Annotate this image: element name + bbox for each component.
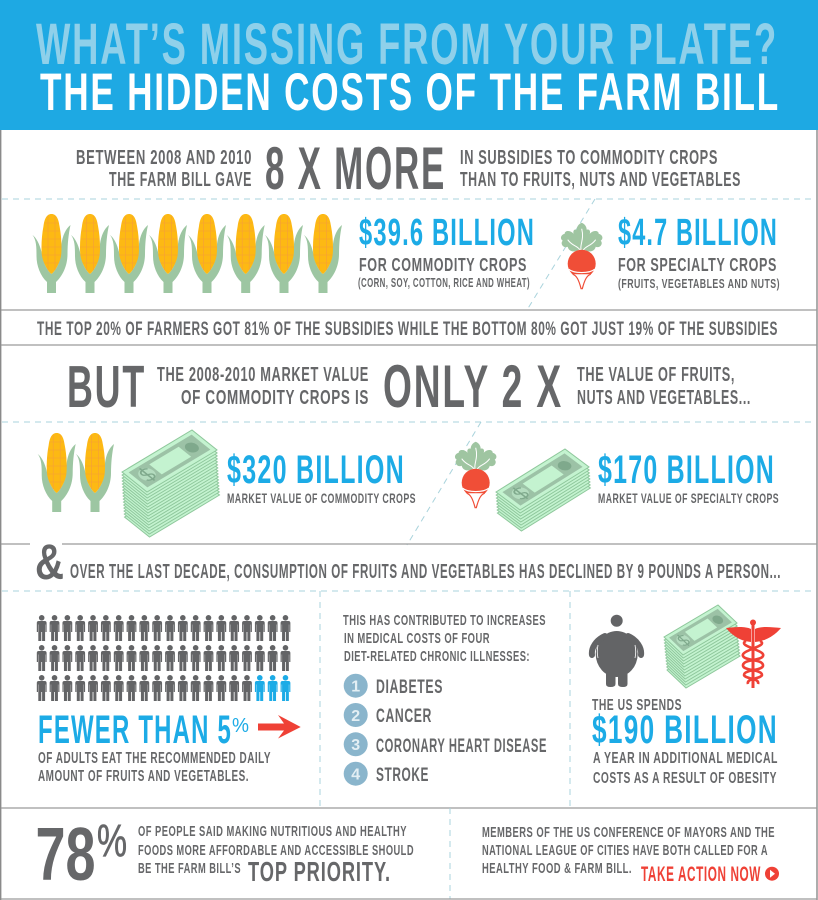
text: 2008-2010 market value: OF COMMODITY CROPS IS bbox=[181, 386, 369, 409]
text: contributed to increases: IN MEDICAL COSTS OF FOUR bbox=[344, 630, 490, 647]
text: of adults eat: AMOUNT OF FRUITS AND VEGETABLES. bbox=[38, 768, 249, 785]
text: 2008-2010 market value bbox=[157, 363, 369, 409]
text: 2008-2010 market value: THE 2008-2010 MARKET VALUE bbox=[157, 363, 369, 386]
panel: subsidy amounts bbox=[32, 212, 780, 293]
text: members of the us conference: HEALTHY FOOD & FARM BILL. bbox=[482, 861, 632, 877]
icon: action arrow circle bbox=[765, 867, 779, 881]
panel: 8x more subsidies statement bbox=[76, 135, 741, 202]
big ampersand: & bbox=[35, 534, 64, 590]
list item 4: STROKE bbox=[376, 764, 429, 786]
text: of people said: BE THE FARM BILL’S bbox=[138, 861, 241, 877]
stat: $190 billion: THE US SPENDS bbox=[592, 697, 682, 714]
icon: two corn cobs bbox=[38, 433, 114, 512]
icon: radish bbox=[561, 223, 602, 289]
text: value of fruits, nuts and vegetables bbox=[577, 363, 751, 409]
panel: market values bbox=[38, 430, 779, 537]
text: between 2008 and 2010: BETWEEN 2008 AND 2010 bbox=[76, 146, 252, 169]
list item 3: CORONARY HEART DISEASE bbox=[376, 735, 547, 757]
stat: $39.6 billion commodity crops: $39.6 BILLION bbox=[359, 212, 535, 254]
text: of people said: FOODS MORE AFFORDABLE AND ACCESSIBLE SHOULD bbox=[138, 843, 414, 859]
panel: take action bbox=[482, 825, 779, 886]
stat: $320 billion bbox=[227, 448, 416, 506]
stat: $39.6 billion commodity crops bbox=[358, 212, 535, 290]
text: contributed to increases bbox=[343, 612, 546, 665]
icon: caduceus bbox=[726, 620, 781, 688]
icon: eight corn cobs bbox=[32, 214, 342, 293]
text: contributed to increases: THIS HAS CONTRIBUTED TO INCREASES bbox=[343, 612, 546, 629]
stat: $170 billion bbox=[598, 448, 779, 506]
stat: $320 billion: $320 BILLION bbox=[227, 448, 405, 492]
big word: but: BUT bbox=[67, 354, 146, 420]
text: of adults eat: OF ADULTS EAT THE RECOMMENDED DAILY bbox=[38, 750, 271, 767]
icon: obese person bbox=[592, 615, 641, 687]
text: between 2008 and 2010: THE FARM BILL GAVE bbox=[109, 168, 252, 191]
text: between 2008 and 2010 bbox=[76, 146, 252, 191]
stat: $39.6 billion commodity crops: (CORN, SOY, COTTON, RICE AND WHEAT) bbox=[358, 276, 530, 290]
text: of adults eat bbox=[38, 750, 271, 785]
list item 2: CANCER bbox=[376, 705, 432, 727]
list item 1: DIABETES bbox=[376, 676, 443, 698]
stat: $4.7 billion specialty crops bbox=[618, 212, 780, 291]
big stat: 78%: % bbox=[97, 815, 127, 866]
chart: pictogram of people bbox=[37, 615, 290, 701]
panel: market value statement bbox=[67, 353, 751, 420]
list item 4 bbox=[344, 762, 429, 786]
text: of people said: TOP PRIORITY. bbox=[248, 856, 391, 887]
list item 3: 3 bbox=[351, 737, 360, 754]
header banner bbox=[0, 0, 818, 130]
list item 3 bbox=[344, 732, 547, 757]
text: contributed to increases: DIET-RELATED CHRONIC ILLNESSES: bbox=[344, 648, 530, 665]
list item 1 bbox=[344, 674, 443, 698]
icon: small money stack bbox=[496, 449, 590, 531]
text: members of the us conference bbox=[482, 825, 775, 877]
list item 2: 2 bbox=[351, 708, 360, 725]
stat: fewer than 5%: FEWER THAN 5 bbox=[38, 708, 232, 752]
stat: $39.6 billion commodity crops: FOR COMMODITY CROPS bbox=[359, 254, 527, 275]
stat: fewer than 5% bbox=[38, 708, 249, 752]
panel: fewer than 5% bbox=[37, 615, 301, 785]
icon: medium money stack bbox=[664, 605, 740, 688]
arrow bbox=[258, 715, 301, 738]
panel: obesity costs bbox=[592, 605, 781, 787]
stat: fewer than 5%: % bbox=[232, 715, 249, 737]
text: in subsidies to commodity crops bbox=[460, 146, 741, 191]
list item 4: 4 bbox=[351, 766, 360, 784]
big stat: 8 x more: 8 X MORE bbox=[265, 135, 446, 202]
icon: large money stack bbox=[122, 430, 220, 537]
text: of people said: OF PEOPLE SAID MAKING NUTRITIOUS AND HEALTHY bbox=[138, 824, 407, 840]
list item 2 bbox=[344, 703, 432, 727]
panel: 78% top priority bbox=[36, 812, 414, 896]
list item 1: 1 bbox=[351, 678, 360, 696]
big stat: 78%: 78 bbox=[36, 812, 96, 896]
stat: $190 billion bbox=[592, 697, 778, 787]
big stat: only 2 x: ONLY 2 X bbox=[383, 353, 563, 420]
panel: consumption decline bbox=[35, 534, 781, 590]
panel: chronic illnesses bbox=[343, 612, 547, 786]
stat: $320 billion: MARKET VALUE OF COMMODITY CROPS bbox=[227, 490, 416, 506]
text: of people said bbox=[138, 824, 414, 887]
icon: radish bbox=[455, 442, 496, 508]
